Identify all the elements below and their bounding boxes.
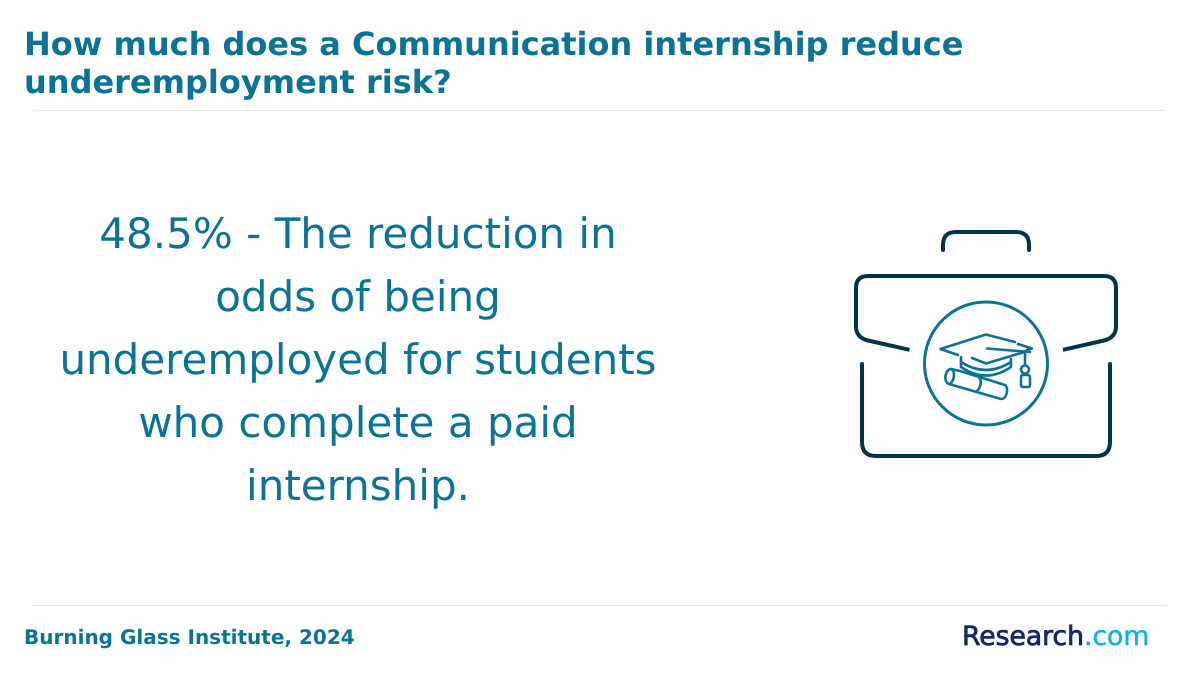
main statistic text: odds of being [215,272,501,321]
source: Burning Glass Institute, 2024 [24,624,355,648]
logo: Research.com [962,621,1149,652]
main statistic text [59,209,657,510]
main statistic text: internship. [246,461,470,510]
main statistic text: who complete a paid [138,398,578,447]
briefcase outline [856,232,1116,456]
title [24,25,963,101]
icon: briefcase with graduation cap [854,230,1118,458]
graduation cap and diploma badge [924,302,1048,425]
main statistic text: 48.5% - The reduction in [99,209,617,258]
main statistic text: underemployed for students [59,335,657,384]
title: underemployment risk? [24,63,452,101]
title: How much does a Communication internship reduce [24,25,963,63]
